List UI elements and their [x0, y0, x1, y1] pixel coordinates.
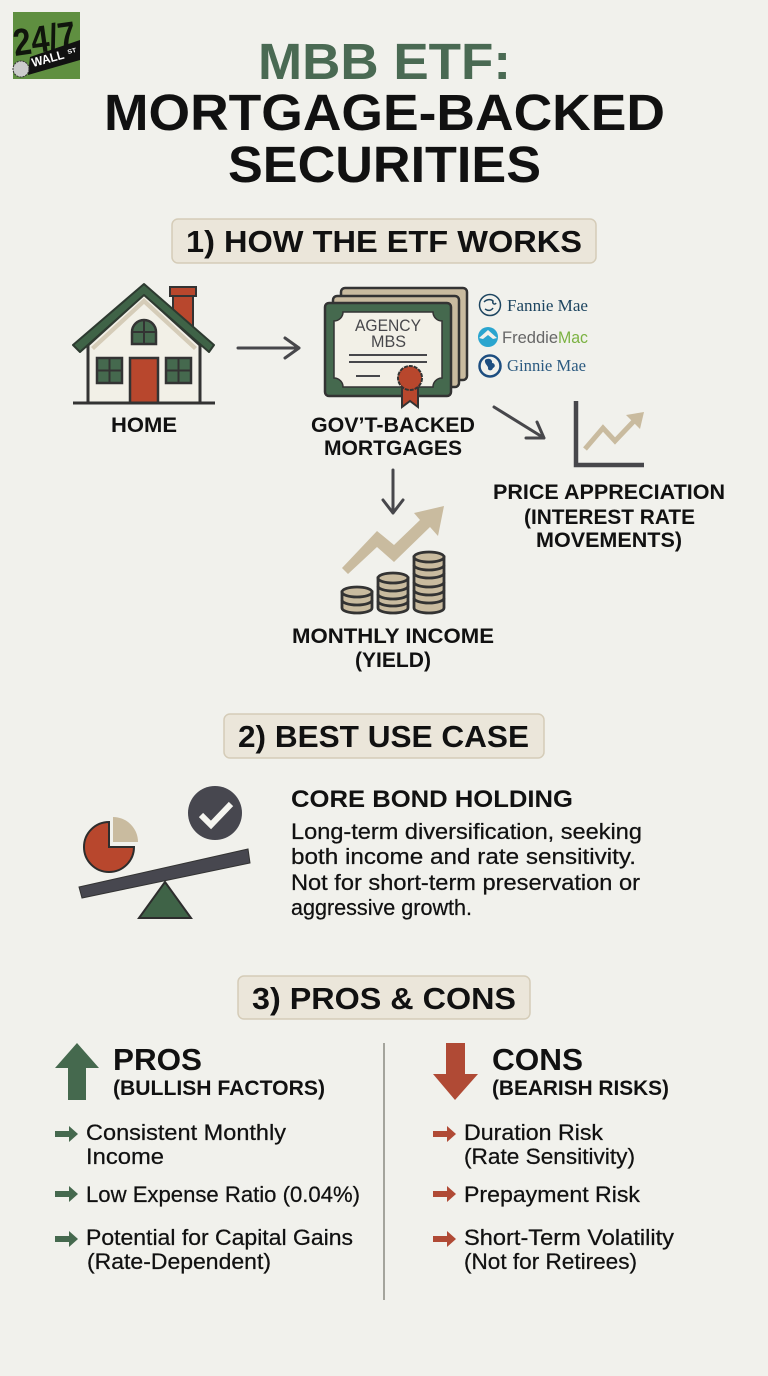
- panel: cons: [433, 1042, 674, 1274]
- icon: agency MBS certificate: [325, 288, 467, 407]
- text block: core bond holding: [291, 786, 642, 920]
- label: monthly income: MONTHLY INCOME: [292, 625, 494, 648]
- pros list: [86, 1120, 360, 1274]
- cons heading: (BEARISH RISKS): [492, 1077, 669, 1100]
- label: government-backed mortgages: [311, 414, 475, 460]
- label: price appreciation: (INTEREST RATE: [524, 506, 695, 529]
- label: price appreciation: [493, 481, 725, 552]
- label: price appreciation: PRICE APPRECIATION: [493, 481, 725, 504]
- logo: 24/7 Wall St: 24/7: [10, 15, 79, 65]
- label: government-backed mortgages: GOV’T-BACKED: [311, 414, 475, 437]
- label: price appreciation: MOVEMENTS): [536, 529, 682, 552]
- pros list: Income: [86, 1144, 164, 1169]
- text block: core bond holding: Not for short-term preservation or: [291, 870, 640, 895]
- pros heading: (BULLISH FACTORS): [113, 1077, 325, 1100]
- title: SECURITIES: [228, 136, 541, 193]
- pros bullet arrows: [55, 1126, 78, 1247]
- cons list: Short-Term Volatility: [464, 1225, 674, 1250]
- text block: core bond holding: both income and rate sensitivity.: [291, 844, 636, 869]
- pros list: (Rate-Dependent): [87, 1249, 271, 1274]
- panel: pros: [55, 1042, 360, 1274]
- logos: agencies: Fannie Mae: [507, 296, 588, 315]
- icon: price chart: [576, 401, 644, 465]
- arrow: home to MBS: [238, 338, 299, 358]
- icon: house: [73, 284, 215, 403]
- text block: core bond holding: Long-term diversification, seeking: [291, 819, 642, 844]
- arrow: MBS to price appreciation: [494, 407, 544, 438]
- title: MORTGAGE-BACKED: [104, 84, 665, 141]
- arrow: MBS to monthly income: [383, 470, 403, 513]
- logos: agencies: Freddie: [502, 328, 558, 347]
- icon: down arrow: [433, 1043, 478, 1100]
- heading: section 1: 1) HOW THE ETF WORKS: [186, 224, 582, 259]
- pros heading: [113, 1042, 325, 1100]
- pros list: Consistent Monthly: [86, 1120, 286, 1145]
- cons heading: CONS: [492, 1042, 583, 1077]
- cons heading: [492, 1042, 669, 1100]
- cons list: (Rate Sensitivity): [464, 1144, 635, 1169]
- cons bullet arrows: [433, 1126, 456, 1247]
- label: government-backed mortgages: MORTGAGES: [324, 437, 462, 460]
- pros list: Low Expense Ratio (0.04%): [86, 1182, 360, 1207]
- label: monthly income: [292, 625, 494, 672]
- pros list: Potential for Capital Gains: [86, 1225, 353, 1250]
- logos: agencies: Mac: [558, 328, 588, 347]
- icon: agency MBS certificate: MBS: [371, 332, 406, 351]
- cons list: (Not for Retirees): [464, 1249, 637, 1274]
- title: [104, 33, 665, 193]
- logo: 24/7 Wall St: WALL: [30, 48, 66, 70]
- logo: 24/7 Wall St: ST: [67, 48, 78, 56]
- label: monthly income: (YIELD): [355, 649, 431, 672]
- logos: agencies: Ginnie Mae: [507, 356, 586, 375]
- icon: rising arrow and coins: [342, 506, 444, 613]
- label: home: HOME: [111, 414, 177, 437]
- text block: core bond holding: CORE BOND HOLDING: [291, 786, 573, 813]
- text block: core bond holding: aggressive growth.: [291, 895, 472, 920]
- cons list: [464, 1120, 674, 1274]
- pros heading: PROS: [113, 1042, 202, 1077]
- icon: agency MBS certificate: AGENCY: [355, 316, 421, 335]
- title: MBB ETF:: [258, 33, 511, 90]
- icon: balance scale with pie and check: [79, 786, 250, 918]
- heading: section 3: 3) PROS & CONS: [252, 981, 516, 1016]
- cons list: Prepayment Risk: [464, 1182, 641, 1207]
- heading: section 2: 2) BEST USE CASE: [238, 719, 529, 754]
- icon: up arrow: [55, 1043, 99, 1100]
- cons list: Duration Risk: [464, 1120, 604, 1145]
- logos: agencies: [478, 294, 588, 376]
